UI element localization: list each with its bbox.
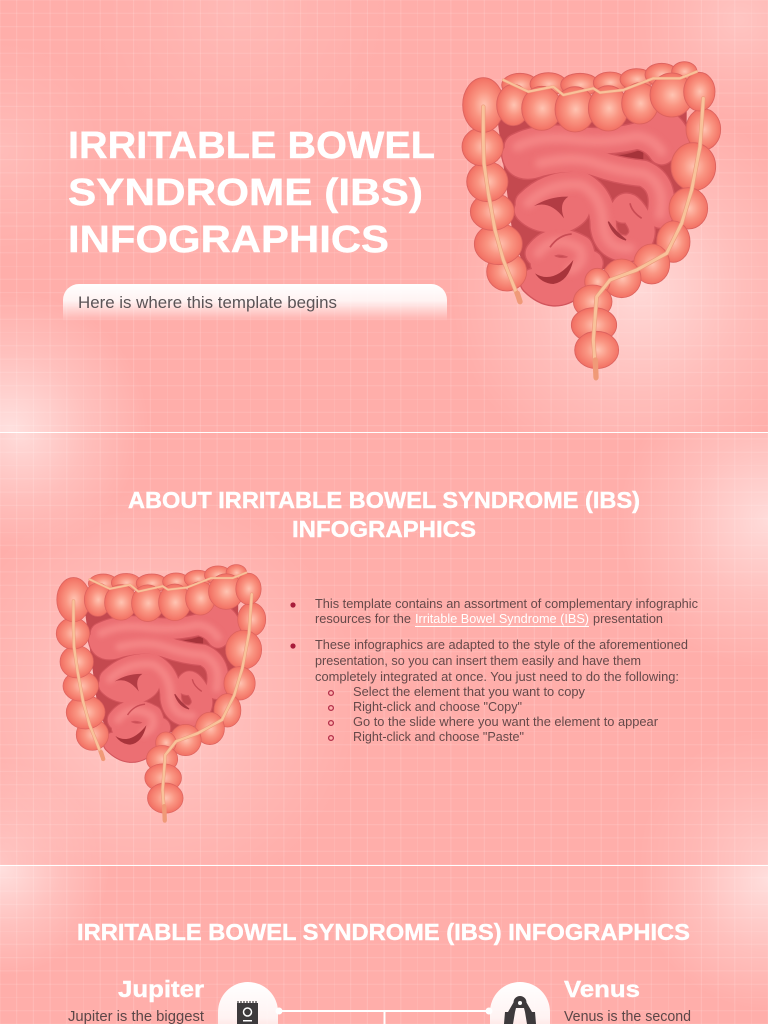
- subtitle pill: [63, 284, 447, 321]
- heading: about: INFOGRAPHICS: [292, 516, 476, 542]
- icon: notepad: [218, 982, 278, 1024]
- about text bullets: Irritable Bowel Syndrome (IBS): [415, 611, 589, 626]
- subtitle pill: Here is where this template begins: [78, 293, 337, 312]
- about text bullets: Go to the slide where you want the element to appear: [353, 714, 659, 729]
- heading: about: [128, 487, 640, 542]
- about text bullets: This template contains an assortment of complementary infographic: [315, 596, 698, 611]
- illustration: intestines large: [462, 62, 721, 378]
- item: Venus: [564, 976, 691, 1024]
- item: Venus: Venus: [564, 976, 640, 1002]
- title: IRRITABLE BOWEL: [68, 125, 435, 167]
- about text bullets: Select the element that you want to copy: [353, 684, 585, 699]
- about text bullets: [290, 596, 698, 744]
- about text bullets: presentation, so you can insert them easily and have them: [315, 653, 641, 668]
- item: Jupiter: [68, 976, 205, 1024]
- about text bullets: presentation: [593, 611, 663, 626]
- about text bullets: These infographics are adapted to the style of the aforementioned: [315, 637, 688, 652]
- about text bullets: Right-click and choose "Paste": [353, 729, 524, 744]
- item: Jupiter: Jupiter: [118, 976, 204, 1002]
- title: SYNDROME (IBS): [68, 172, 423, 214]
- about text bullets: resources for the: [315, 611, 411, 626]
- heading: about: ABOUT IRRITABLE BOWEL SYNDROME (IBS): [128, 487, 640, 513]
- title: INFOGRAPHICS: [68, 219, 389, 261]
- title: [68, 125, 435, 261]
- heading: infographics: IRRITABLE BOWEL SYNDROME (IBS) INFOGRAPHICS: [77, 919, 690, 945]
- icon: hand gripper: [490, 982, 550, 1024]
- connector lines: [276, 1008, 492, 1024]
- about text bullets: Right-click and choose "Copy": [353, 699, 522, 714]
- illustration: intestines small: [56, 565, 266, 821]
- about text bullets: completely integrated at once. You just need to do the following:: [315, 669, 679, 684]
